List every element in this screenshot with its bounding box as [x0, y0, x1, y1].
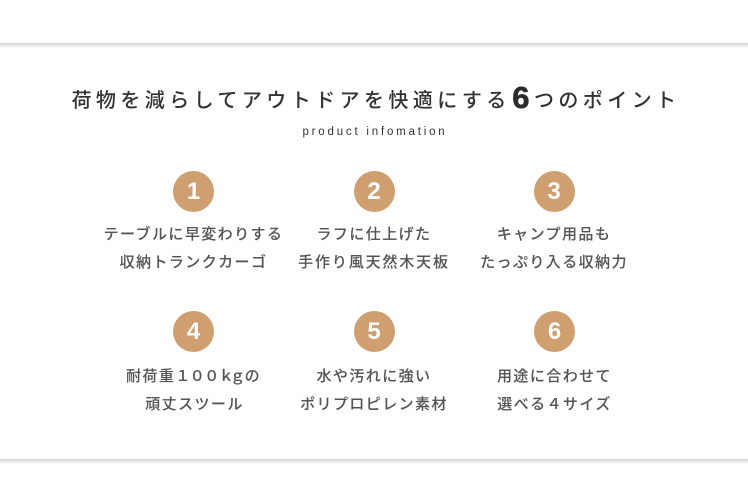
point 5: [300, 311, 448, 413]
point 2: [298, 171, 450, 271]
number badge 2: 2: [367, 178, 381, 205]
point 1: [104, 171, 283, 271]
point 6: [497, 311, 612, 413]
point 5 line 2: ポリプロピレン素材: [300, 396, 448, 413]
number badge 5: 5: [367, 318, 381, 345]
point 3 line 1: キャンプ用品も: [497, 226, 611, 243]
title: 荷物を減らしてアウトドアを快適にする6つのポイント: [72, 80, 680, 115]
point 2 line 1: ラフに仕上げた: [317, 226, 431, 243]
point 4: [126, 311, 261, 413]
point 5 line 1: 水や汚れに強い: [317, 368, 431, 385]
number badge 3: 3: [547, 178, 561, 205]
number badge 3: [534, 171, 574, 212]
point 3: [480, 171, 628, 271]
point 1 line 1: テーブルに早変わりする: [104, 226, 283, 243]
number badge 6: 6: [548, 318, 561, 345]
number badge 4: 4: [187, 318, 200, 345]
number badge 2: [354, 171, 394, 212]
number badge 1: 1: [187, 178, 200, 205]
point 6 line 1: 用途に合わせて: [497, 368, 612, 385]
number badge 5: [354, 311, 394, 352]
point 4 line 1: 耐荷重１００ｋｇの: [126, 368, 261, 385]
point 2 line 2: 手作り風天然木天板: [298, 254, 450, 271]
subtitle: product infomation: [302, 126, 448, 138]
number badge 4: [173, 311, 214, 352]
point 6 line 2: 選べる４サイズ: [497, 396, 612, 413]
point 1 line 2: 収納トランクカーゴ: [120, 254, 267, 271]
number badge 1: [173, 171, 214, 212]
number badge 6: [534, 311, 575, 352]
point 4 line 2: 頑丈スツール: [145, 396, 244, 413]
point 3 line 2: たっぷり入る収納力: [480, 254, 628, 271]
